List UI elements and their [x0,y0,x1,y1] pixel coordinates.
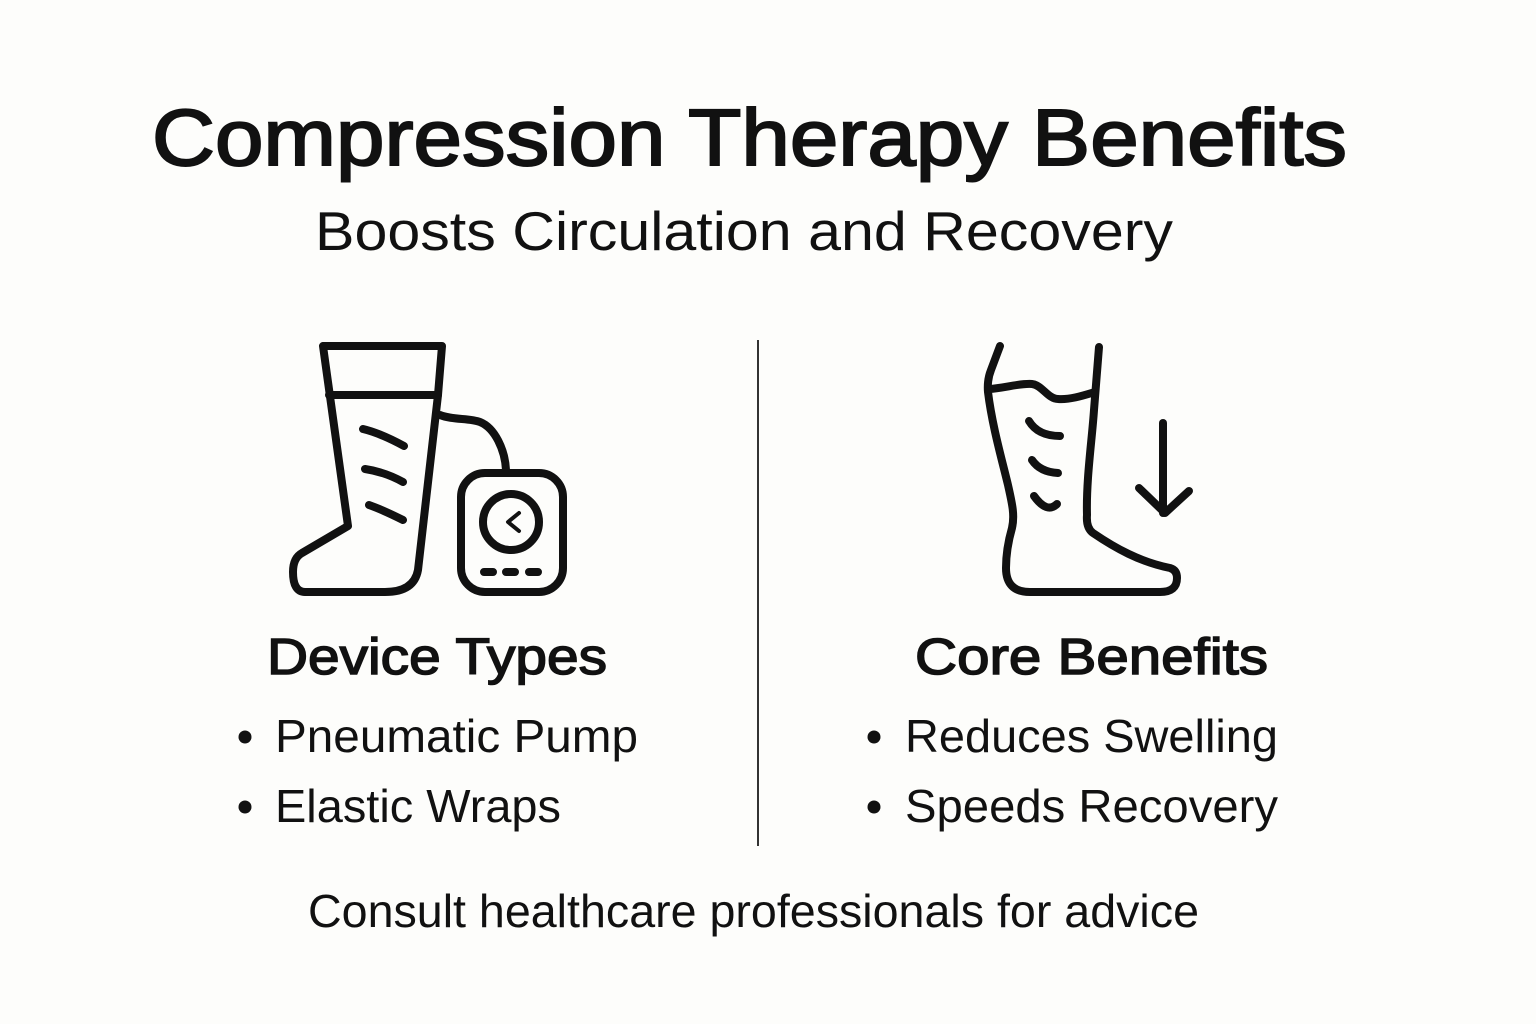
list item: elastic wraps: Elastic Wraps [275,780,561,832]
panel: device types [238,628,638,832]
subtitle: Boosts Circulation and Recovery [315,200,1174,262]
icon: compression boot with pneumatic pump [293,346,563,592]
icon: leg with downward arrow [988,346,1189,592]
divider [757,340,759,846]
list item: reduces swelling: Reduces Swelling [905,710,1278,762]
list item: pneumatic pump: Pneumatic Pump [275,710,638,762]
title: Compression Therapy Benefits [152,93,1347,182]
panel: core benefits [868,628,1278,832]
list item: speeds recovery: Speeds Recovery [905,780,1278,832]
heading: core benefits: Core Benefits [915,628,1268,685]
footer note: Consult healthcare professionals for advice [308,885,1199,937]
heading: device types: Device Types [267,628,607,685]
